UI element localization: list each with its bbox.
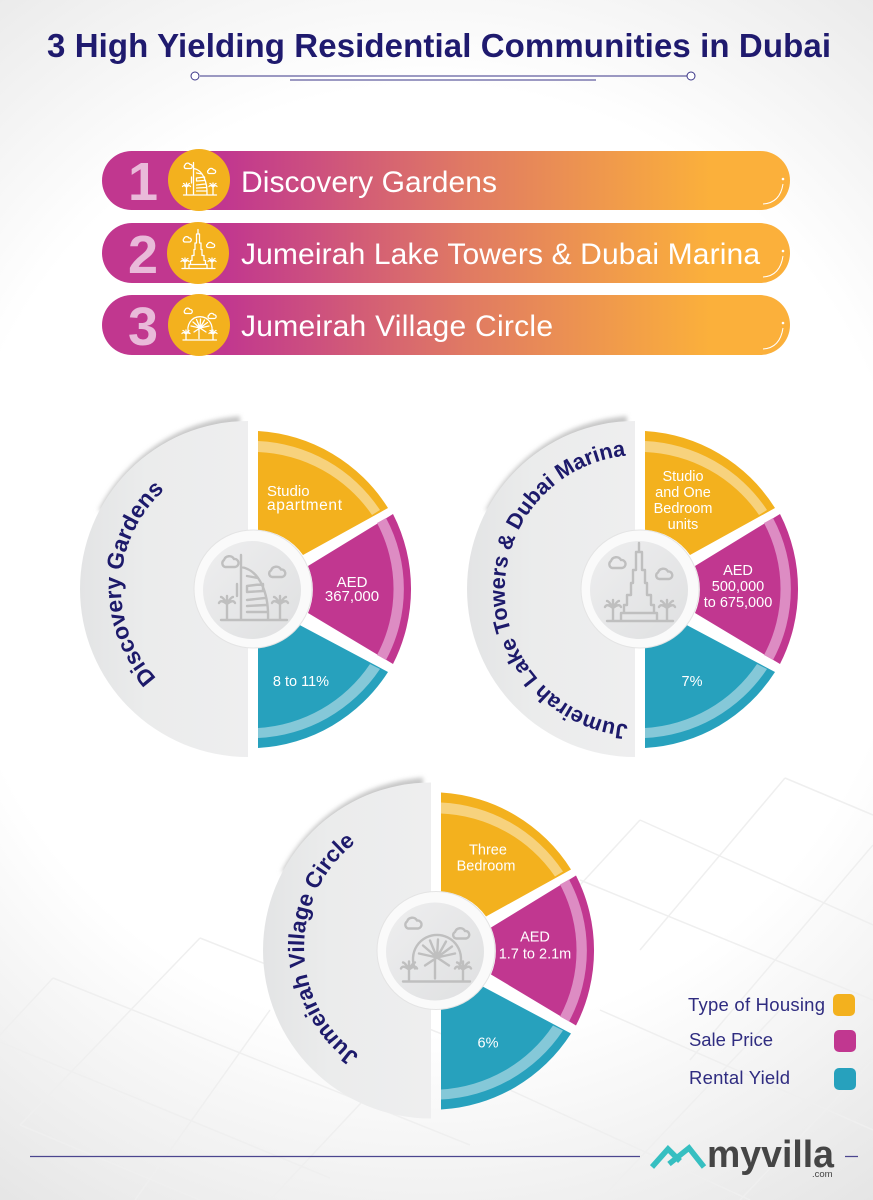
segment: rental yield: 7% bbox=[682, 674, 703, 690]
segment: type of housing bbox=[645, 431, 775, 555]
half disc with name bbox=[467, 421, 635, 757]
segment: type of housing: and One bbox=[655, 485, 711, 501]
segment: rental yield bbox=[258, 622, 388, 748]
segment: type of housing: units bbox=[668, 517, 698, 533]
segment: sale price: to 675,000 bbox=[704, 595, 772, 611]
pill: Jumeirah Lake Towers and Dubai Marina: 2 bbox=[128, 225, 158, 285]
chart shadow bbox=[485, 416, 627, 511]
logo: myvilla bbox=[652, 1134, 835, 1180]
segment: type of housing: apartment bbox=[267, 497, 343, 514]
segment: type of housing: Bedroom bbox=[654, 501, 712, 517]
curved name: Discovery Gardens bbox=[108, 484, 162, 688]
ranked list bbox=[102, 149, 790, 357]
segment: type of housing: Studio bbox=[267, 483, 310, 500]
segment: type of housing: Bedroom bbox=[457, 858, 515, 874]
title: 3 High Yielding Residential Communities in Dubai bbox=[47, 27, 831, 64]
segment: type of housing bbox=[258, 431, 388, 555]
segment: type of housing: Studio bbox=[662, 469, 704, 485]
chart shadow bbox=[98, 416, 240, 511]
curved name: Jumeirah Lake Towers & Dubai Marina bbox=[493, 444, 628, 739]
segment: rental yield bbox=[441, 984, 571, 1110]
legend: rental yield bbox=[689, 1067, 856, 1090]
center disc bbox=[581, 530, 699, 648]
pill: Jumeirah Lake Towers and Dubai Marina bbox=[102, 222, 790, 285]
half disc with name bbox=[263, 782, 431, 1118]
legend bbox=[688, 994, 856, 1090]
segment: sale price bbox=[695, 514, 798, 664]
curved name: Jumeirah Village Circle bbox=[288, 836, 358, 1064]
segment: sale price: AED bbox=[520, 930, 550, 946]
icon: tall tower bbox=[605, 543, 675, 621]
footer rule bbox=[30, 1156, 858, 1158]
half disc with name bbox=[80, 421, 248, 757]
pill: Discovery Gardens bbox=[102, 149, 790, 212]
chart: Discovery Gardens bbox=[80, 414, 412, 757]
segment: rental yield bbox=[645, 622, 775, 748]
segment: sale price bbox=[308, 514, 411, 664]
legend: type of housing: Type of Housing bbox=[688, 994, 825, 1015]
center disc bbox=[377, 892, 495, 1010]
icon: palm dome bbox=[401, 918, 471, 982]
legend: sale price: Sale Price bbox=[689, 1029, 773, 1050]
center disc bbox=[194, 530, 312, 648]
chart: Jumeirah Village Circle bbox=[263, 776, 594, 1118]
legend: rental yield: Rental Yield bbox=[689, 1067, 790, 1088]
segment: sale price: 500,000 bbox=[712, 579, 764, 595]
chart: Jumeirah Lake Towers and Dubai Marina bbox=[467, 414, 798, 757]
segment: sale price bbox=[491, 876, 594, 1026]
pill: Discovery Gardens: 1 bbox=[128, 152, 158, 212]
pill: Jumeirah Village Circle: Jumeirah Village Circle bbox=[241, 310, 553, 343]
title divider bbox=[191, 72, 695, 80]
legend: sale price bbox=[689, 1029, 856, 1052]
segment: type of housing: Three bbox=[469, 842, 507, 858]
segment: sale price: AED bbox=[337, 574, 368, 591]
pill: Discovery Gardens: Discovery Gardens bbox=[241, 166, 497, 199]
segment: sale price: AED bbox=[723, 563, 753, 579]
background grid bbox=[0, 778, 873, 1200]
segment: sale price: 1.7 to 2.1m bbox=[499, 946, 571, 962]
segment: type of housing bbox=[441, 792, 571, 916]
segment: rental yield: 8 to 11% bbox=[273, 674, 329, 690]
pill: Jumeirah Village Circle: 3 bbox=[128, 297, 158, 357]
chart shadow bbox=[281, 778, 423, 872]
segment: rental yield: 6% bbox=[478, 1036, 499, 1052]
logo: myvilla: .com bbox=[812, 1169, 833, 1180]
logo: myvilla: myvilla bbox=[707, 1134, 835, 1176]
icon: sail hotel bbox=[219, 555, 288, 620]
pill: Jumeirah Village Circle bbox=[102, 294, 790, 357]
segment: sale price: 367,000 bbox=[325, 588, 379, 605]
pill: Jumeirah Lake Towers and Dubai Marina: Jumeirah Lake Towers & Dubai Marina bbox=[241, 238, 760, 271]
